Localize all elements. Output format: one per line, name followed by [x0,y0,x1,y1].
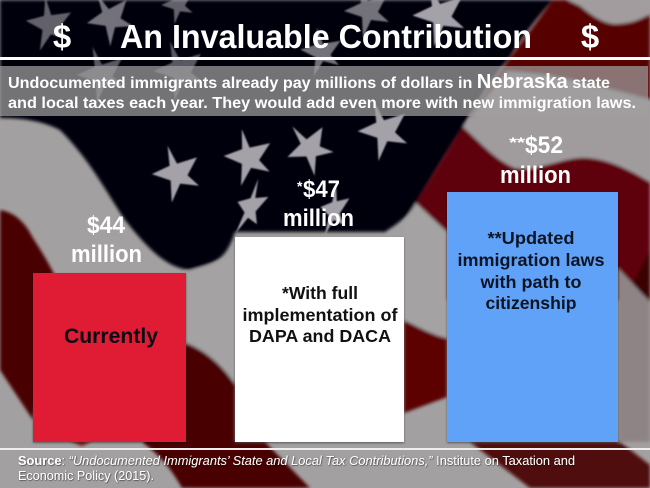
source note: Source: “Undocumented Immigrants’ State and Local Tax Contributions,” Institute on Taxation and [18,454,575,468]
top-right stripe [470,0,650,116]
centre-right red stripe [404,320,447,413]
bar: currently [33,273,186,442]
bar: DAPA and DACA: *With full [282,283,358,303]
bottom-right red stripe [470,442,650,488]
value: **$52 million: million [500,162,571,189]
dark lower-left stripe [0,210,54,420]
value: **$52 million: ** [509,134,526,150]
dark blue canton [0,0,553,270]
value: $44 million: million [71,241,142,268]
grey fold patch between bars [186,256,235,384]
intro text: Undocumented immigrants already pay millions of dollars in Nebraska state [8,71,610,93]
grey fold, right [463,72,650,182]
bar: updated immigration laws: citizenship [486,293,576,313]
bar: DAPA and DACA: DAPA and DACA [249,326,391,346]
bar: currently: Currently [64,325,158,348]
bar: updated immigration laws [447,192,618,442]
stars [21,0,464,240]
value: $44 million [71,212,142,268]
bar: DAPA and DACA [235,237,404,442]
value: *$47 million: $47 [303,176,340,203]
value: $44 million: $44 [87,212,126,239]
intro panel [0,66,648,116]
source note: Economic Policy (2015). [18,469,154,483]
source note [18,454,575,483]
intro text [8,71,636,112]
value: *$47 million: * [297,178,303,194]
bar: updated immigration laws: **Updated [488,228,574,248]
value: *$47 million: million [283,205,354,232]
left dollar sign: $ [53,18,71,55]
title rule [0,57,650,60]
value: *$47 million [283,176,354,232]
intro text: and local taxes each year. They would add even more with new immigration laws. [8,95,636,112]
bar: updated immigration laws: with path to [479,272,582,292]
right dollar sign: $ [581,18,599,55]
value: **$52 million: $52 [525,132,563,159]
bar: updated immigration laws: immigration laws [458,250,605,270]
value: **$52 million [500,132,571,189]
title [53,18,599,55]
source rule [0,448,650,450]
heading text: An Invaluable Contribution [120,18,532,55]
bar: DAPA and DACA: implementation of [242,305,398,325]
